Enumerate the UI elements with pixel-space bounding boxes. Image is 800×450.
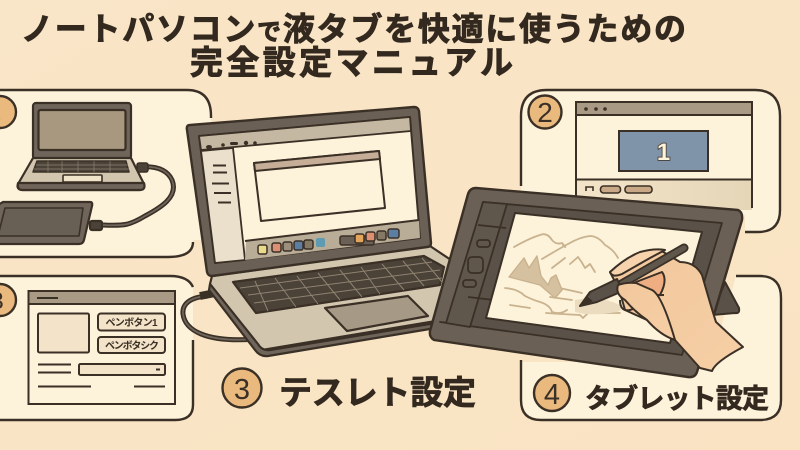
pen button 1: ペンボタン1	[106, 317, 158, 329]
monitor block 1: 1	[657, 139, 670, 166]
label 3	[222, 368, 476, 411]
label 4: タブレット設定	[585, 383, 769, 414]
trackpad	[325, 296, 428, 331]
pen button 1	[98, 314, 165, 330]
label 3: 3	[234, 374, 250, 406]
fingers over pen	[617, 283, 675, 340]
tablet screen	[486, 213, 702, 343]
panel: step 2 display settings	[521, 90, 780, 232]
title	[21, 11, 686, 81]
footer buttons	[586, 186, 652, 193]
title: 完全設定マニュアル	[190, 44, 513, 81]
panel: step 4 tablet settings	[521, 276, 781, 420]
canvas window	[254, 151, 385, 221]
icon: small tablet	[0, 202, 102, 244]
app left sidebar	[201, 148, 245, 263]
drawing tablet	[430, 188, 743, 377]
icon: small laptop	[18, 103, 144, 190]
monitor block 1	[619, 131, 708, 171]
label 3: テスレト設定	[279, 374, 476, 411]
step number 3 cropped	[0, 284, 16, 316]
pen button 2	[98, 337, 165, 353]
step number 4	[534, 375, 570, 411]
tablet inner bezel	[440, 202, 722, 355]
panel: step 3 pen settings	[0, 276, 193, 420]
side button strip	[446, 202, 507, 327]
dropdown	[79, 364, 165, 375]
stylus pen	[580, 248, 684, 306]
mountain sketch	[505, 234, 621, 318]
panel: step 1 connection	[0, 90, 211, 257]
settings window	[28, 291, 175, 404]
pen button 2: ペンボタシク	[105, 340, 159, 352]
center laptop	[183, 107, 454, 356]
step number 1	[0, 96, 16, 128]
tablet stand	[712, 282, 739, 315]
step number 2	[528, 96, 562, 128]
display settings window	[576, 102, 752, 212]
hand	[610, 249, 743, 371]
laptop base	[209, 246, 454, 356]
laptop cable	[183, 292, 256, 340]
color swatches bar	[245, 220, 420, 260]
app menu bar	[199, 117, 411, 150]
cable between laptop and tablet	[103, 163, 173, 225]
laptop lid	[187, 107, 431, 276]
title: ノートパソコンで液タブを快適に使うための	[21, 11, 686, 47]
tablet body	[430, 188, 742, 377]
step number 2: 2	[537, 97, 553, 128]
keyboard	[233, 256, 444, 313]
step number 4: 4	[544, 379, 560, 411]
